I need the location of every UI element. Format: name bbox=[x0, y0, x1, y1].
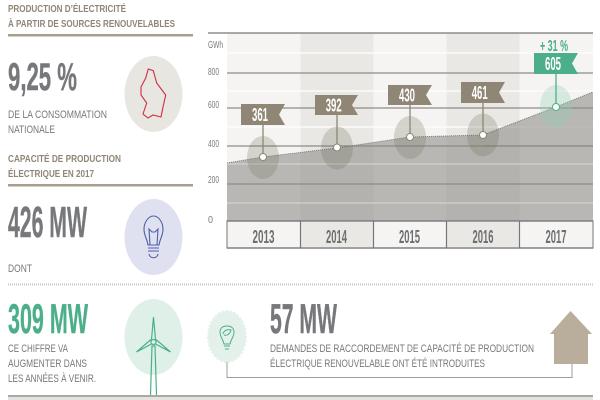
axis labels: 400 bbox=[208, 138, 219, 150]
heading: renewable production: PRODUCTION D’ÉLECTRICITÉ bbox=[8, 2, 126, 15]
stat: 57 MW: 57 MW bbox=[270, 295, 337, 342]
heading: renewable production: À PARTIR DE SOURCES RENOUVELABLES bbox=[8, 17, 175, 30]
text: share of national consumption: NATIONALE bbox=[8, 124, 55, 136]
text: share of national consumption bbox=[8, 109, 107, 136]
year axis boxes: 2016 bbox=[472, 227, 494, 247]
data point 2015: 430 bbox=[388, 85, 432, 159]
data point 2017: 605: 605 bbox=[545, 54, 561, 74]
text: figure will grow: AUGMENTER DANS bbox=[8, 358, 87, 370]
text: dont: DONT bbox=[8, 263, 32, 275]
text: connection requests: ÉLECTRIQUE RENOUVELABLE ONT ÉTÉ INTRODUITES bbox=[270, 357, 485, 370]
icon: Luxembourg map bbox=[124, 56, 182, 132]
data point 2016: 461: 461 bbox=[472, 83, 488, 103]
axis labels bbox=[208, 39, 223, 226]
text: figure will grow: LES ANNÉES À VENIR. bbox=[8, 372, 96, 385]
stat: 309 MW: 309 MW bbox=[8, 295, 88, 342]
year axis boxes: 2013 bbox=[252, 227, 274, 247]
text: figure will grow bbox=[8, 343, 96, 385]
year axis boxes: 2017 bbox=[546, 227, 566, 247]
icon: house bbox=[550, 311, 592, 364]
year axis boxes: 2014 bbox=[326, 227, 347, 247]
text: connection requests bbox=[270, 342, 534, 370]
data point 2017: 605 bbox=[534, 53, 578, 128]
axis labels: 600 bbox=[208, 99, 219, 111]
data point 2014: 392 bbox=[315, 95, 358, 170]
bottom rule bbox=[8, 395, 593, 400]
area: GWh series bbox=[227, 92, 593, 221]
icon: light bulb bbox=[124, 199, 182, 275]
icon: wind turbine bbox=[124, 299, 182, 395]
heading: capacity 2017 bbox=[8, 152, 193, 186]
text: share of national consumption: DE LA CONSOMMATION bbox=[8, 109, 107, 121]
heading: capacity 2017: CAPACITÉ DE PRODUCTION bbox=[8, 152, 121, 165]
data point 2016: 461 bbox=[461, 82, 505, 156]
text: figure will grow: CE CHIFFRE VA bbox=[8, 343, 68, 355]
divider bbox=[8, 284, 593, 286]
stat: 9,25 %: 9,25 % bbox=[8, 56, 77, 99]
axis labels: 200 bbox=[208, 174, 219, 186]
heading: renewable production bbox=[8, 2, 193, 36]
axis labels: 0 bbox=[208, 214, 213, 226]
axis labels: GWh bbox=[208, 39, 223, 51]
chart: production 2013-2017 bbox=[208, 33, 593, 221]
year axis boxes bbox=[227, 221, 593, 248]
heading: capacity 2017: ÉLECTRIQUE EN 2017 bbox=[8, 167, 94, 180]
data point 2013: 361: 361 bbox=[252, 105, 268, 125]
connector line bbox=[227, 362, 572, 378]
data point 2015: 430: 430 bbox=[399, 86, 415, 106]
axis labels: 800 bbox=[208, 66, 219, 78]
icon: eco bulb badge bbox=[208, 311, 246, 362]
text: 426 MW bbox=[8, 198, 87, 247]
year axis boxes: 2015 bbox=[399, 227, 420, 247]
data point 2014: 392: 392 bbox=[326, 96, 342, 116]
callout: +31 %: + 31 % bbox=[540, 38, 568, 55]
data point 2013: 361 bbox=[241, 104, 285, 179]
